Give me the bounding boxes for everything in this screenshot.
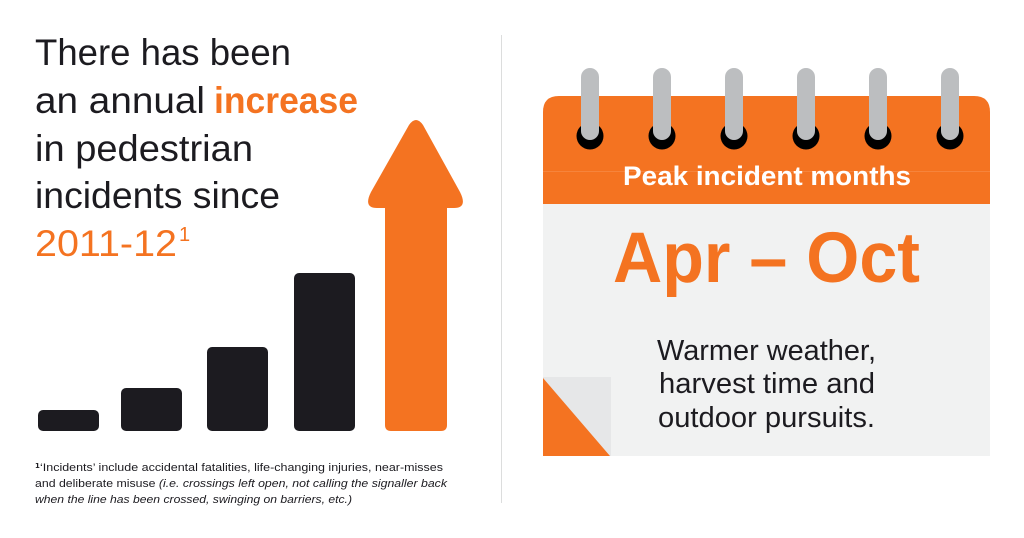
- heading: annual increase in incidents: There has been: [35, 32, 291, 73]
- heading: annual increase in incidents: incidents since: [35, 175, 280, 216]
- panel: calendar: [543, 68, 990, 456]
- months: Apr – Oct: [613, 219, 920, 298]
- heading: annual increase in incidents: 1: [179, 224, 190, 246]
- page fold: [543, 377, 611, 456]
- calendar description: [657, 335, 876, 434]
- footnote: ‘Incidents’ include accidental fatalities, life-changing injuries, near-misses: [40, 462, 443, 474]
- bar chart: rising incidents: [38, 273, 355, 431]
- footnote: and deliberate misuse (i.e. crossings left open, not calling the signaller back: [35, 478, 448, 490]
- calendar title: Peak incident months: [623, 161, 911, 191]
- footnote: 1: [35, 462, 40, 470]
- heading: annual increase in incidents: increase: [214, 80, 358, 121]
- heading: annual increase in incidents: an annual: [35, 80, 205, 121]
- calendar rings: [576, 68, 964, 150]
- calendar page: [543, 200, 990, 456]
- heading: annual increase in incidents: in pedestrian: [35, 128, 253, 169]
- divider: [501, 35, 502, 503]
- calendar description: outdoor pursuits.: [658, 402, 875, 434]
- footnote: [35, 462, 448, 506]
- heading: annual increase in incidents: 2011-12: [35, 223, 177, 264]
- arrow: upward orange: [368, 120, 463, 431]
- footnote: when the line has been crossed, swinging on barriers, etc.): [35, 494, 352, 506]
- heading: annual increase in incidents: [35, 32, 358, 264]
- calendar description: harvest time and: [659, 368, 875, 400]
- calendar description: Warmer weather,: [657, 335, 876, 367]
- calendar header: [543, 96, 990, 204]
